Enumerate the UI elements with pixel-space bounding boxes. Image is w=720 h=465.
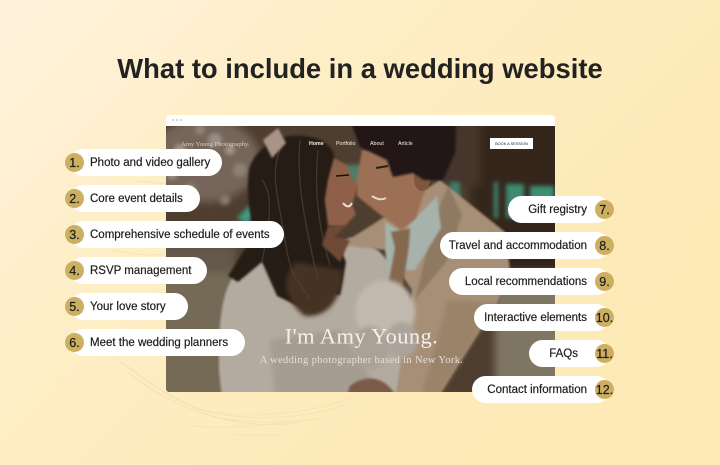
list item 9: Local recommendations bbox=[465, 276, 587, 288]
list item 1: 1. bbox=[69, 156, 80, 170]
list item 2 bbox=[70, 185, 200, 212]
man's jacket bbox=[340, 180, 510, 400]
title: What to include in a wedding website bbox=[117, 53, 603, 84]
list item 5: 5. bbox=[69, 300, 80, 314]
list item 5 bbox=[70, 293, 188, 320]
list item 4 bbox=[70, 257, 207, 284]
list item 12 bbox=[472, 376, 610, 403]
woman's face bbox=[325, 158, 358, 226]
list item 7: Gift registry bbox=[528, 204, 587, 216]
list item 3: 3. bbox=[69, 228, 80, 242]
hero heading: I'm Amy Young. bbox=[285, 324, 438, 348]
list item 1: Photo and video gallery bbox=[90, 157, 210, 169]
list item 4: RSVP management bbox=[90, 265, 191, 277]
list item 7 bbox=[508, 196, 610, 223]
list item 3 bbox=[70, 221, 284, 248]
site logo text: Amy Young Photography. bbox=[181, 141, 250, 148]
list item 5: Your love story bbox=[90, 301, 166, 313]
wedding couple photo bbox=[166, 126, 555, 392]
list item 11: 11. bbox=[596, 347, 613, 361]
man's shirt and tie bbox=[385, 196, 441, 270]
book a session button: BOOK A SESSION bbox=[495, 141, 528, 146]
list item 6: 6. bbox=[69, 336, 80, 350]
list item 4: 4. bbox=[69, 264, 80, 278]
list item 6 bbox=[70, 329, 245, 356]
man's head bbox=[356, 150, 425, 230]
list item 7: 7. bbox=[599, 203, 610, 217]
woman's hair bbox=[228, 135, 346, 306]
list item 9: 9. bbox=[599, 275, 610, 289]
site navigation: About bbox=[370, 141, 384, 147]
list item 1 bbox=[70, 149, 222, 176]
list item 11: FAQs bbox=[549, 348, 578, 360]
site navigation: Portfolio bbox=[336, 141, 355, 147]
list item 2: Core event details bbox=[90, 193, 183, 205]
list item 11 bbox=[529, 340, 610, 367]
list item 10: 10. bbox=[596, 311, 613, 325]
site navigation: Article bbox=[398, 141, 413, 147]
site navigation: Home bbox=[309, 141, 324, 147]
list item 6: Meet the wedding planners bbox=[90, 337, 228, 349]
list item 8: 8. bbox=[599, 239, 610, 253]
list item 3: Comprehensive schedule of events bbox=[90, 229, 270, 241]
bouquet bbox=[352, 280, 418, 370]
list item 8 bbox=[440, 232, 610, 259]
list item 12: 12. bbox=[596, 383, 613, 397]
browser window mockup bbox=[166, 115, 555, 392]
window title bar bbox=[166, 115, 555, 126]
list item 8: Travel and accommodation bbox=[449, 240, 587, 252]
hero subheading: A wedding photographer based in New York. bbox=[260, 355, 463, 366]
site navigation bbox=[309, 141, 413, 147]
list item 2: 2. bbox=[69, 192, 80, 206]
list item 10 bbox=[474, 304, 610, 331]
book a session button bbox=[490, 138, 533, 149]
list item 12: Contact information bbox=[487, 384, 587, 396]
woman's dress bbox=[219, 238, 405, 400]
list item 9 bbox=[449, 268, 610, 295]
list item 10: Interactive elements bbox=[484, 312, 587, 324]
tiara bbox=[263, 128, 286, 158]
